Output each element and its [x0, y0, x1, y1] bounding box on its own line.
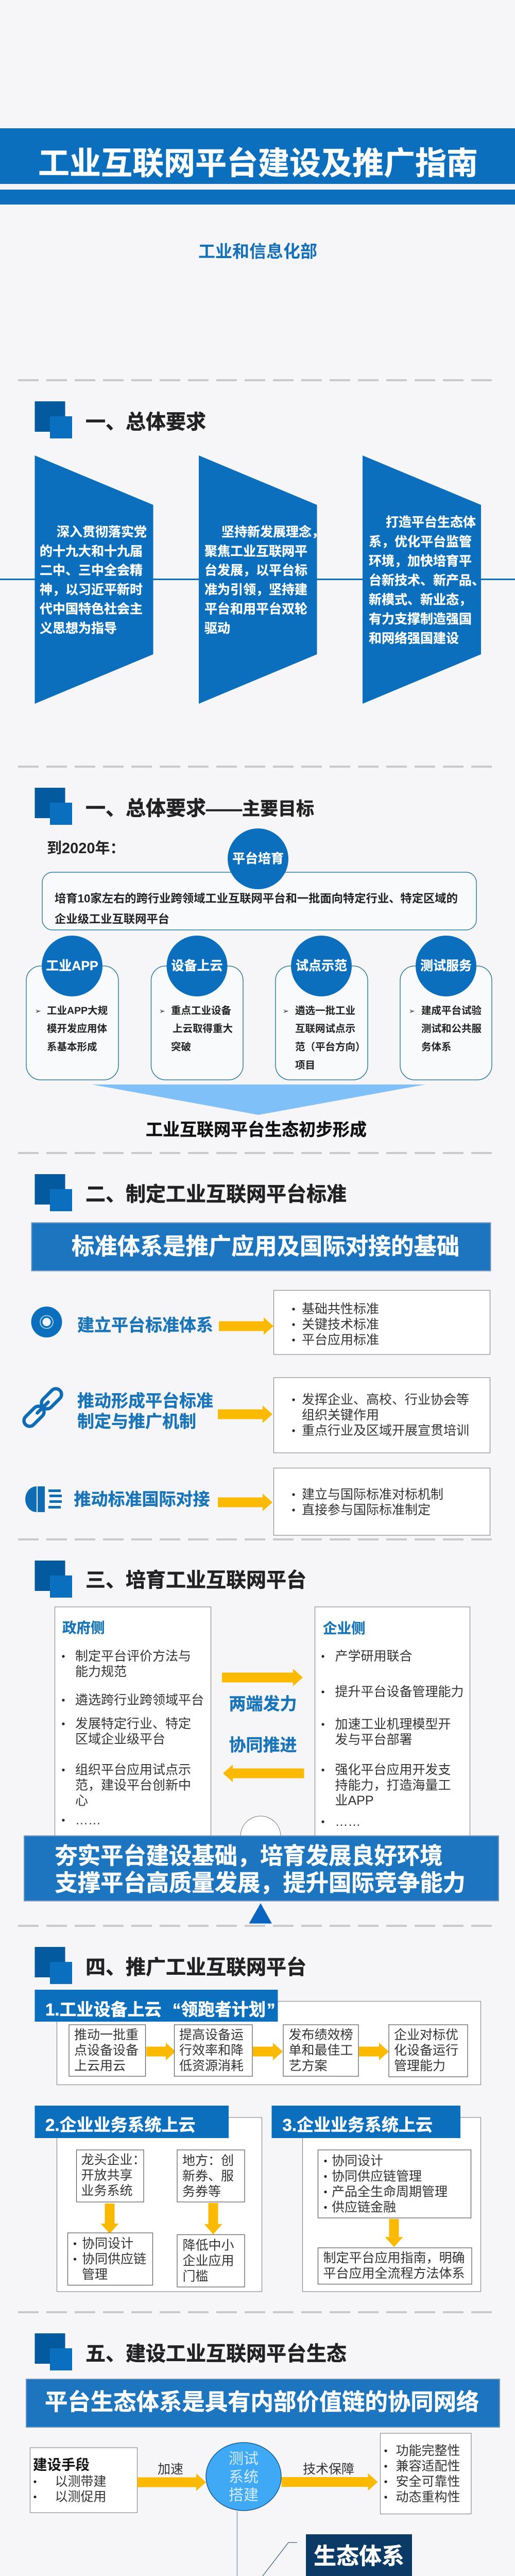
box: leading enterprises — [76, 2150, 146, 2202]
node: test system: 系统 — [229, 2469, 259, 2485]
panel: enterprise systems on cloud 3 — [272, 2106, 481, 2292]
panel: enterprise side: …… — [335, 1815, 360, 1829]
middle: two-end collaboration: 两端发力 — [229, 1694, 297, 1714]
box: construction means: 建设手段 — [33, 2456, 90, 2473]
panel: industrial APP: 模开发应用体 — [47, 1023, 108, 1035]
box: lower threshold: 降低中小 — [182, 2238, 234, 2252]
panel: enterprise side: 强化平台应用开发支 — [335, 1763, 451, 1777]
row: standard mechanism: 制定与推广机制 — [77, 1412, 196, 1431]
panel: equipment on cloud: 突破 — [171, 1041, 191, 1053]
box: local government: 地方：创 — [182, 2154, 234, 2168]
arrow: converging triangle — [92, 1084, 425, 1115]
heading: main goals: 一、总体要求——主要目标 — [85, 798, 314, 820]
panel: government side: 制定平台评价方法与 — [75, 1649, 191, 1664]
arrow — [146, 2043, 176, 2060]
panel: requirement pennant 3: 打造平台生态体 — [386, 515, 476, 530]
panel: enterprise side: 提升平台设备管理能力 — [335, 1685, 464, 1699]
banner: solid foundation: 夯实平台建设基础，培育发展良好环境 — [55, 1843, 443, 1869]
step 4: 企业对标优 — [394, 2028, 458, 2042]
arrow — [359, 2043, 389, 2060]
arrow — [101, 2204, 118, 2234]
panel: industrial APP: ➢ — [35, 1007, 41, 1015]
subtitle: 工业和信息化部 — [198, 242, 317, 261]
heading: section 2 — [35, 1174, 347, 1211]
box: capability list — [318, 2150, 471, 2218]
step 4: 化设备运行 — [394, 2043, 458, 2058]
banner: solid foundation: 支撑平台高质量发展，提升国际竞争能力 — [55, 1871, 466, 1896]
panel: enterprise side: 持能力，打造海量工 — [335, 1778, 451, 1793]
panel: requirement pennant 2: 平台和用平台双轮 — [204, 602, 307, 616]
panel: test service: 建成平台试验 — [421, 1005, 482, 1016]
row: standard mechanism: 重点行业及区域开展宣贯培训 — [302, 1423, 469, 1438]
arrow — [218, 1405, 272, 1423]
panel: enterprise systems on cloud 2: 2.企业业务系统上云 — [45, 2115, 196, 2134]
row: standard mechanism: 发挥企业、高校、行业协会等 — [302, 1393, 469, 1407]
arrow: accelerate: 加速 — [158, 2462, 183, 2477]
panel: equipment on cloud leader plan: “ — [173, 2000, 181, 2019]
panel: enterprise side: 产学研用联合 — [335, 1649, 413, 1664]
step 2: 低资源消耗 — [179, 2059, 244, 2073]
banner: standards — [32, 1223, 490, 1270]
box: local government: 新券、服 — [182, 2169, 234, 2183]
panel: equipment on cloud leader plan: 1.工业设备上云 — [45, 2000, 162, 2019]
icon: disc — [31, 1307, 62, 1337]
heading: section 3: 三、培育工业互联网平台 — [85, 1569, 306, 1592]
row: standard system — [31, 1290, 490, 1354]
panel: platform cultivation: 平台培育 — [232, 851, 284, 866]
panel: government side — [55, 1607, 211, 1837]
box: application guide: 平台应用全流程方法体系 — [323, 2266, 465, 2281]
box: capability list: 产品全生命周期管理 — [332, 2184, 448, 2199]
panel: enterprise side: 加速工业机理模型开 — [335, 1717, 451, 1732]
panel: requirement pennant 1: 的十九大和十九届 — [40, 544, 143, 558]
panel: industrial APP — [26, 936, 118, 1080]
panel: government side: 组织平台应用试点示 — [75, 1763, 191, 1777]
box: properties: 兼容适配性 — [396, 2459, 460, 2473]
box: leading enterprises: 业务系统 — [81, 2183, 133, 2198]
arrow — [253, 2043, 283, 2060]
banner: solid foundation — [24, 1836, 499, 1901]
panel: requirement pennant 1 — [35, 455, 153, 704]
panel: government side: 发展特定行业、特定 — [75, 1717, 191, 1731]
box: application guide — [318, 2248, 472, 2284]
panel: test service: 测试和公共服 — [421, 1023, 482, 1035]
connector line — [237, 2511, 238, 2576]
panel: platform cultivation: 企业级工业互联网平台 — [55, 912, 169, 925]
box: lower threshold: 企业应用 — [182, 2253, 234, 2268]
panel: requirement pennant 1: 深入贯彻落实党 — [57, 525, 147, 539]
arrow — [219, 1317, 273, 1335]
icon: chain link — [22, 1386, 64, 1429]
row: international alignment: 推动标准国际对接 — [74, 1490, 210, 1509]
box: construction means — [30, 2448, 137, 2513]
panel: requirement pennant 1: 义思想为指导 — [40, 621, 117, 636]
arrow — [204, 2203, 222, 2234]
row: standard system: 基础共性标准 — [302, 1302, 379, 1316]
panel: test service — [400, 936, 492, 1080]
arrow: accelerate — [137, 2462, 206, 2491]
panel: platform cultivation — [42, 828, 476, 930]
panel: requirement pennant 1: 代中国特色社会主 — [40, 602, 143, 616]
panel: industrial APP: 工业APP大规 — [47, 1005, 108, 1016]
text: by 2020: 到2020年： — [47, 840, 125, 857]
banner: standards: 标准体系是推广应用及国际对接的基础 — [72, 1234, 459, 1259]
panel: enterprise side: 企业侧 — [323, 1620, 366, 1636]
row: standard mechanism — [22, 1378, 490, 1453]
panel: industrial APP: 工业APP — [46, 959, 98, 973]
panel: government side: 区域企业级平台 — [75, 1732, 165, 1747]
panel: enterprise systems on cloud 3: 3.企业业务系统上云 — [282, 2115, 433, 2134]
row: standard system: 关键技术标准 — [302, 1317, 379, 1332]
title banner — [0, 128, 515, 205]
panel: requirement pennant 2: 台发展，以平台标 — [204, 563, 307, 578]
box: properties: 功能完整性 — [396, 2444, 460, 2458]
step 4 — [389, 2025, 468, 2077]
panel: requirement pennant 2: 驱动 — [204, 621, 230, 636]
panel: enterprise systems on cloud 2 — [35, 2106, 262, 2292]
box: local government: 务券等 — [182, 2184, 221, 2199]
step 3: 艺方案 — [288, 2059, 328, 2073]
panel: test service: 测试服务 — [420, 959, 472, 973]
heading: section 1: 一、总体要求 — [85, 411, 206, 434]
box: collaborative design — [68, 2233, 152, 2285]
panel: equipment on cloud: ➢ — [159, 1007, 165, 1015]
icon: blue triangle — [249, 1903, 272, 1924]
box: lower threshold: 门槛 — [182, 2269, 209, 2283]
step 3: 单和最佳工 — [288, 2043, 353, 2058]
step 2: 提高设备运 — [179, 2028, 244, 2042]
node: test system: 搭建 — [229, 2486, 259, 2504]
panel: pilot demonstration: ➢ — [283, 1007, 289, 1015]
box: capability list: 协同供应链管理 — [332, 2169, 422, 2183]
panel: equipment on cloud leader plan: 领跑者计划 — [181, 2000, 266, 2019]
row: international alignment: 直接参与国际标准制定 — [302, 1503, 431, 1517]
box: capability list: 协同设计 — [332, 2154, 383, 2168]
panel: equipment on cloud — [151, 936, 243, 1080]
heading: main goals — [35, 788, 314, 825]
row: standard system: 平台应用标准 — [302, 1333, 379, 1347]
step 1: 上云用云 — [74, 2059, 126, 2073]
step 1: 推动一批重 — [74, 2028, 139, 2042]
panel: pilot demonstration: 范（平台方向） — [295, 1041, 366, 1053]
heading: section 3 — [35, 1561, 306, 1598]
heading: section 2: 二、制定工业互联网平台标准 — [85, 1184, 347, 1206]
panel: requirement pennant 3: 新模式、新业态， — [369, 592, 472, 607]
box: properties: 动态重构性 — [396, 2490, 460, 2504]
panel: pilot demonstration: 互联网试点示 — [295, 1023, 355, 1035]
box: collaborative design: 协同设计 — [82, 2236, 133, 2251]
node: test system — [206, 2443, 281, 2511]
middle: two-end collaboration: 协同推进 — [229, 1735, 297, 1755]
panel: enterprise side: 发与平台部署 — [335, 1733, 413, 1747]
step 1: 点设备设备 — [74, 2043, 139, 2058]
panel: enterprise side: 业APP — [335, 1793, 374, 1808]
step 3: 发布绩效榜 — [288, 2028, 353, 2042]
banner: ecosystem — [26, 2379, 500, 2427]
step 3 — [283, 2025, 358, 2076]
panel: enterprise side — [315, 1607, 470, 1837]
panel: requirement pennant 2: 聚焦工业互联网平 — [204, 544, 307, 558]
box: leading enterprises: 龙头企业： — [81, 2153, 146, 2167]
panel: pilot demonstration: 项目 — [295, 1060, 315, 1071]
heading: section 4 — [35, 1947, 306, 1984]
step 4: 管理能力 — [394, 2059, 445, 2073]
row: standard system: 建立平台标准体系 — [77, 1316, 213, 1334]
row: international alignment: 建立与国际标准对标机制 — [302, 1487, 443, 1502]
panel: government side: 能力规范 — [75, 1665, 127, 1679]
icon: headlight — [25, 1486, 62, 1512]
panel: equipment on cloud: 重点工业设备 — [171, 1005, 232, 1016]
step 2 — [174, 2025, 252, 2076]
node: test system: 测试 — [229, 2450, 259, 2467]
panel: pilot demonstration: 遴选一批工业 — [295, 1005, 355, 1016]
text: ecosystem formed: 工业互联网平台生态初步形成 — [146, 1120, 367, 1139]
panel: test service: 务体系 — [421, 1042, 452, 1053]
leader line — [258, 2543, 297, 2576]
step 2: 行效率和降 — [179, 2043, 244, 2058]
title banner: 工业互联网平台建设及推广指南 — [38, 146, 478, 181]
banner: ecosystem: 平台生态体系是具有内部价值链的协同网络 — [45, 2389, 479, 2415]
panel: government side: …… — [75, 1813, 101, 1827]
panel: pilot demonstration: 试点示范 — [296, 959, 347, 973]
panel: requirement pennant 3: 台新技术、新产品、 — [369, 573, 485, 588]
box: properties — [380, 2433, 471, 2514]
panel: government side: 遴选跨行业跨领域平台 — [75, 1693, 204, 1707]
panel: platform cultivation: 培育10家左右的跨行业跨领域工业互联网平台和一批面向特定行业、特定区域的 — [55, 891, 458, 905]
panel: government side: 范，建设平台创新中 — [75, 1778, 191, 1793]
step 1 — [69, 2025, 145, 2076]
box: lower threshold — [177, 2235, 245, 2287]
panel: requirement pennant 2: 准为引领，坚持建 — [204, 583, 307, 597]
panel: government side: 政府侧 — [62, 1620, 105, 1636]
box: properties: 安全可靠性 — [396, 2475, 460, 2489]
box: capability list: 供应链金融 — [332, 2200, 396, 2214]
row: international alignment — [25, 1468, 490, 1535]
label: ecosystem: 生态体系 — [314, 2544, 404, 2569]
panel: equipment on cloud: 上云取得重大 — [173, 1023, 233, 1035]
panel: industrial APP: 系基本形成 — [47, 1041, 97, 1053]
arrow: technical assurance — [281, 2462, 378, 2490]
panel: test service: ➢ — [409, 1007, 415, 1015]
panel: requirement pennant 3: 环境，加快培育平 — [369, 553, 472, 569]
arrow: technical assurance: 技术保障 — [303, 2462, 354, 2477]
panel: requirement pennant 3: 有力支撑制造强国 — [369, 612, 472, 626]
box: construction means: 以测促用 — [55, 2489, 107, 2504]
box: construction means: 以测带建 — [55, 2475, 107, 2489]
panel: requirement pennant 2 — [199, 455, 324, 704]
panel: government side: 心 — [75, 1794, 88, 1808]
box: leading enterprises: 开放共享 — [81, 2168, 133, 2182]
heading: section 5: 五、建设工业互联网平台生态 — [85, 2343, 347, 2365]
panel: requirement pennant 1: 二中、三中全会精 — [40, 564, 143, 578]
row: standard mechanism: 组织关键作用 — [302, 1408, 379, 1422]
box: local government — [177, 2150, 245, 2202]
panel: requirement pennant 3: 系，优化平台监管 — [369, 534, 472, 549]
arrow — [218, 1494, 272, 1511]
label: ecosystem — [306, 2534, 412, 2576]
panel: equipment on cloud: 设备上云 — [171, 959, 223, 973]
heading: section 4: 四、推广工业互联网平台 — [85, 1957, 306, 1979]
panel: requirement pennant 2: 坚持新发展理念， — [221, 524, 324, 539]
row: standard mechanism: 推动形成平台标准 — [77, 1391, 213, 1411]
panel: pilot demonstration — [276, 936, 368, 1080]
box: application guide: 制定平台应用指南，明确 — [323, 2251, 465, 2265]
arrow — [385, 2219, 403, 2247]
panel: equipment on cloud leader plan — [35, 1990, 481, 2084]
box: collaborative design: 管理 — [82, 2267, 108, 2282]
heading: section 5 — [35, 2333, 347, 2370]
panel: requirement pennant 1: 神，以习近平新时 — [40, 583, 143, 597]
box: collaborative design: 协同供应链 — [82, 2252, 146, 2266]
panel: equipment on cloud leader plan: ” — [267, 2000, 275, 2019]
heading: section 1 — [35, 401, 206, 438]
middle: two-end collaboration — [222, 1669, 304, 1782]
panel: requirement pennant 3: 和网络强国建设 — [369, 632, 459, 646]
circle outline behind banner — [241, 1816, 281, 1856]
panel: requirement pennant 3 — [363, 455, 485, 704]
